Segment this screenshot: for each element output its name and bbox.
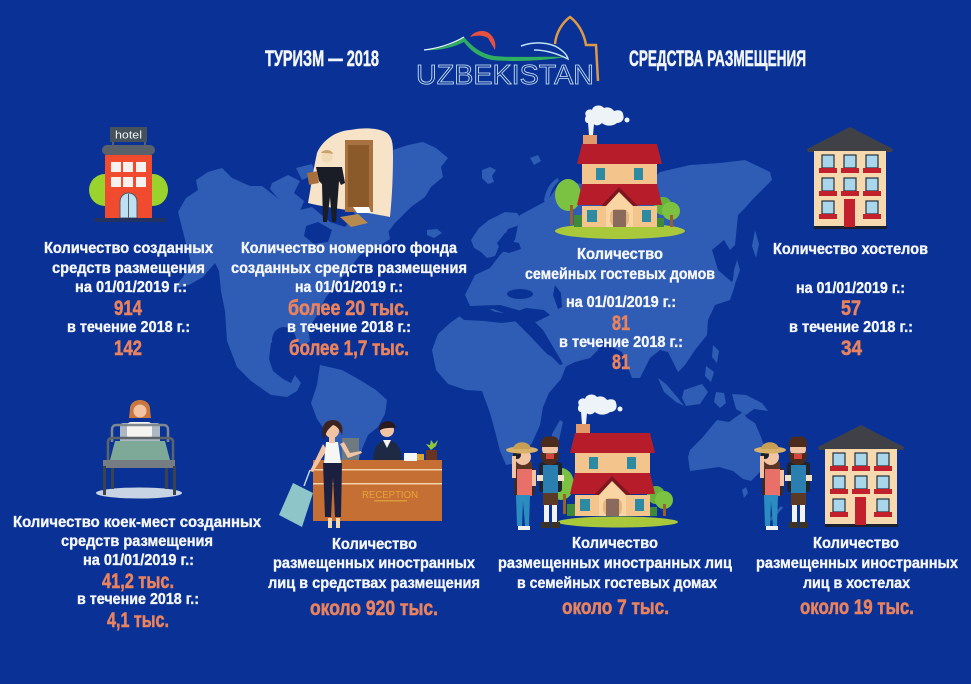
- text: beds stats: Количество коек-мест созданных: [13, 514, 261, 531]
- text: guest houses stats: семейных гостевых домов: [525, 266, 715, 283]
- panel: created accommodation facilities: [44, 127, 213, 360]
- text: room stock stats: более 20 тыс.: [288, 296, 409, 320]
- text: beds stats: [13, 514, 261, 632]
- text: hostel foreigners stats: около 19 тыс.: [800, 595, 914, 619]
- text: guest houses stats: [525, 246, 715, 374]
- text: beds stats: 4,1 тыс.: [107, 608, 169, 632]
- icon: person in bed: [96, 400, 182, 498]
- icon: guest house: [555, 106, 685, 239]
- text: beds stats: на 01/01/2019 г.:: [83, 552, 194, 569]
- text: guest houses stats: в течение 2018 г.:: [559, 334, 683, 351]
- panel: family guest houses: [525, 106, 715, 374]
- text: room stock stats: созданных средств размещения: [231, 260, 467, 277]
- text: hostels stats: на 01/01/2019 г.:: [796, 280, 905, 297]
- text: guest house foreigners stats: около 7 тыс.: [562, 595, 669, 619]
- text: beds stats: в течение 2018 г.:: [77, 591, 199, 608]
- title left: ТУРИЗМ — 2018: [265, 46, 379, 71]
- text: guest houses stats: Количество: [577, 246, 663, 263]
- text: beds stats: 41,2 тыс.: [102, 569, 174, 593]
- icon: reception desk: RECEPTION: [362, 490, 418, 501]
- text: created facilities stats: в течение 2018 г.:: [67, 319, 190, 336]
- text: foreign guests stats: размещенных иностранных: [273, 555, 475, 572]
- text: guest house foreigners stats: размещенных иностранных лиц: [498, 555, 732, 572]
- panel: hostels: [773, 127, 928, 360]
- text: foreign guests stats: Количество: [332, 536, 417, 553]
- text: hostels stats: в течение 2018 г.:: [789, 319, 913, 336]
- text: guest house foreigners stats: [498, 535, 732, 619]
- text: guest houses stats: 81: [612, 350, 630, 374]
- icon: tourists and guest house: [506, 395, 678, 530]
- icon: reception desk: [279, 420, 442, 528]
- text: room stock stats: более 1,7 тыс.: [289, 336, 409, 360]
- logo wordmark: UZBEKISTAN: [416, 59, 594, 90]
- icon: doorman at door: [307, 128, 393, 227]
- text: created facilities stats: Количество созданных: [44, 240, 213, 257]
- panel: foreign guests in hostels: [754, 425, 958, 619]
- text: created facilities stats: 914: [114, 296, 142, 320]
- title right: СРЕДСТВА РАЗМЕЩЕНИЯ: [629, 46, 806, 71]
- text: hostels stats: 57: [841, 296, 861, 320]
- text: hostels stats: [773, 241, 928, 360]
- panel: beds: [13, 400, 261, 632]
- text: foreign guests stats: [268, 536, 480, 620]
- logo: Uzbekistan: [416, 17, 598, 90]
- icon: tourists and hostel: [754, 425, 904, 530]
- inland seas: [272, 222, 563, 365]
- icon: hostel: [807, 127, 893, 229]
- text: created facilities stats: на 01/01/2019 г.:: [75, 279, 187, 296]
- text: created facilities stats: средств размещения: [52, 260, 205, 277]
- text: room stock stats: Количество номерного фонда: [241, 240, 457, 257]
- text: guest house foreigners stats: в семейных гостевых домах: [517, 575, 717, 592]
- text: created facilities stats: [44, 240, 213, 360]
- text: hostel foreigners stats: размещенных иностранных: [756, 555, 958, 572]
- text: created facilities stats: 142: [114, 336, 142, 360]
- panel: room stock: [231, 128, 467, 360]
- text: guest houses stats: 81: [612, 311, 630, 335]
- text: guest houses stats: на 01/01/2019 г.:: [566, 294, 676, 311]
- world map: [173, 142, 783, 521]
- icon: hotel: [89, 127, 168, 222]
- text: room stock stats: в течение 2018 г.:: [287, 319, 411, 336]
- text: foreign guests stats: около 920 тыс.: [310, 596, 438, 620]
- text: guest house foreigners stats: Количество: [572, 535, 658, 552]
- text: hostels stats: Количество хостелов: [773, 241, 928, 258]
- text: room stock stats: на 01/01/2019 г.:: [295, 279, 403, 296]
- icon: hotel: hotel: [115, 130, 142, 142]
- panel: foreign guests in accommodation: [268, 420, 480, 620]
- text: hostels stats: 34: [841, 336, 862, 360]
- text: room stock stats: [231, 240, 467, 360]
- panel: foreign guests in guest houses: [498, 395, 732, 619]
- text: beds stats: средств размещения: [61, 533, 213, 550]
- text: foreign guests stats: лиц в средствах размещения: [268, 575, 480, 592]
- text: hostel foreigners stats: [756, 535, 958, 619]
- text: hostel foreigners stats: Количество: [813, 535, 899, 552]
- text: hostel foreigners stats: лиц в хостелах: [803, 575, 910, 592]
